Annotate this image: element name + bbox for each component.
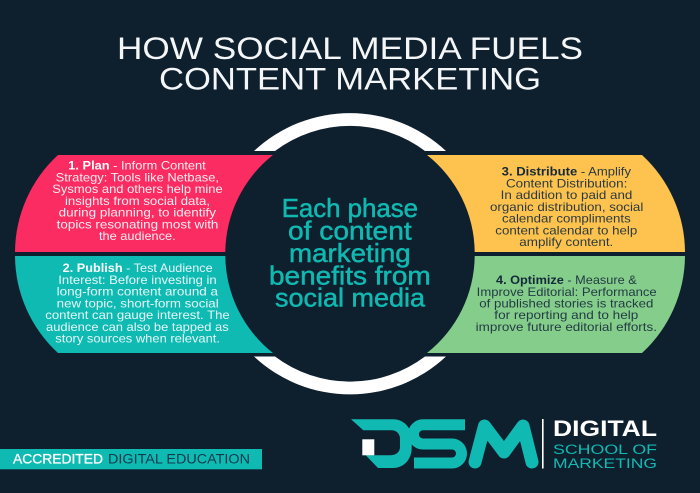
text: optimize: Improve Editorial: Performance xyxy=(477,285,657,299)
text: publish: content can gauge interest. The xyxy=(45,308,230,322)
panel: 2. Publish xyxy=(15,256,273,353)
DSM logo xyxy=(351,416,657,471)
text: distribute: Content Distribution: xyxy=(506,176,627,190)
text: plan: topics resonating most with xyxy=(57,218,218,232)
logo divider xyxy=(542,419,544,468)
centre statement: benefits from xyxy=(269,260,431,290)
text: publish: audience can also be tapped as xyxy=(46,320,229,334)
text: distribute: calendar compliments xyxy=(502,212,631,226)
panel: 1. Plan xyxy=(15,155,273,252)
white ring around the centre circle xyxy=(254,113,446,394)
logo letter S xyxy=(413,425,465,463)
logo wordmark: MARKETING xyxy=(553,456,657,471)
text: optimize: 4. Optimize - Measure & xyxy=(496,273,637,287)
text: publish: Interest: Before investing in xyxy=(58,273,217,287)
text: publish: new topic, short-form social xyxy=(57,296,219,310)
text: plan: Strategy: Tools like Netbase, xyxy=(56,170,219,184)
text: plan: Sysmos and others help mine xyxy=(52,182,223,196)
panel shape: teal xyxy=(15,256,273,353)
text: publish: long-form content around a xyxy=(57,284,218,298)
logo wordmark: DIGITAL xyxy=(553,416,657,441)
centre statement: Each phase xyxy=(282,193,418,223)
text: optimize: for reporting and to help xyxy=(494,308,639,322)
panel: 3. Distribute xyxy=(427,155,685,252)
logo wordmark xyxy=(553,416,657,471)
text: plan: the audience. xyxy=(99,229,176,243)
text: distribute xyxy=(490,165,643,249)
logo letter M xyxy=(475,426,532,462)
centre statement: marketing xyxy=(289,238,411,268)
text: plan: 1. Plan - Inform Content xyxy=(68,159,206,173)
panel shape: green xyxy=(427,256,685,353)
accreditation badge xyxy=(0,449,262,469)
title: CONTENT MARKETING xyxy=(159,60,541,96)
text: plan xyxy=(52,159,223,243)
text: distribute: organic distribution, social xyxy=(490,200,643,214)
text: optimize: improve future editorial efforts. xyxy=(476,320,657,334)
centre statement: social media xyxy=(275,283,426,313)
text: distribute: amplify content. xyxy=(519,235,613,249)
centre statement xyxy=(269,193,431,313)
text: distribute: In addition to paid and xyxy=(501,188,632,202)
badge text: white part: ACCREDITED xyxy=(13,451,103,466)
text: publish: 2. Publish - Test Audience xyxy=(63,261,213,275)
title: HOW SOCIAL MEDIA FUELS xyxy=(117,30,583,66)
text: publish: story sources when relevant. xyxy=(55,332,220,346)
text: plan: insights from social data, xyxy=(65,194,210,208)
title xyxy=(117,30,583,96)
logo letter D xyxy=(351,419,412,468)
text: optimize: of published stories is tracked xyxy=(479,296,653,310)
panel shape: yellow xyxy=(427,155,685,252)
panel shape: pink xyxy=(15,155,273,252)
text: plan: during planning, to identify xyxy=(59,206,216,220)
panel: 4. Optimize xyxy=(427,256,685,353)
text: distribute: content calendar to help xyxy=(495,224,638,238)
centre statement: of content xyxy=(288,216,413,246)
logo white square xyxy=(362,439,374,455)
logo wordmark: SCHOOL OF xyxy=(553,442,657,457)
text: publish xyxy=(45,261,230,346)
text: distribute: 3. Distribute - Amplify xyxy=(502,165,631,179)
text: optimize xyxy=(476,273,657,334)
badge text: dark part: DIGITAL EDUCATION xyxy=(108,451,250,466)
